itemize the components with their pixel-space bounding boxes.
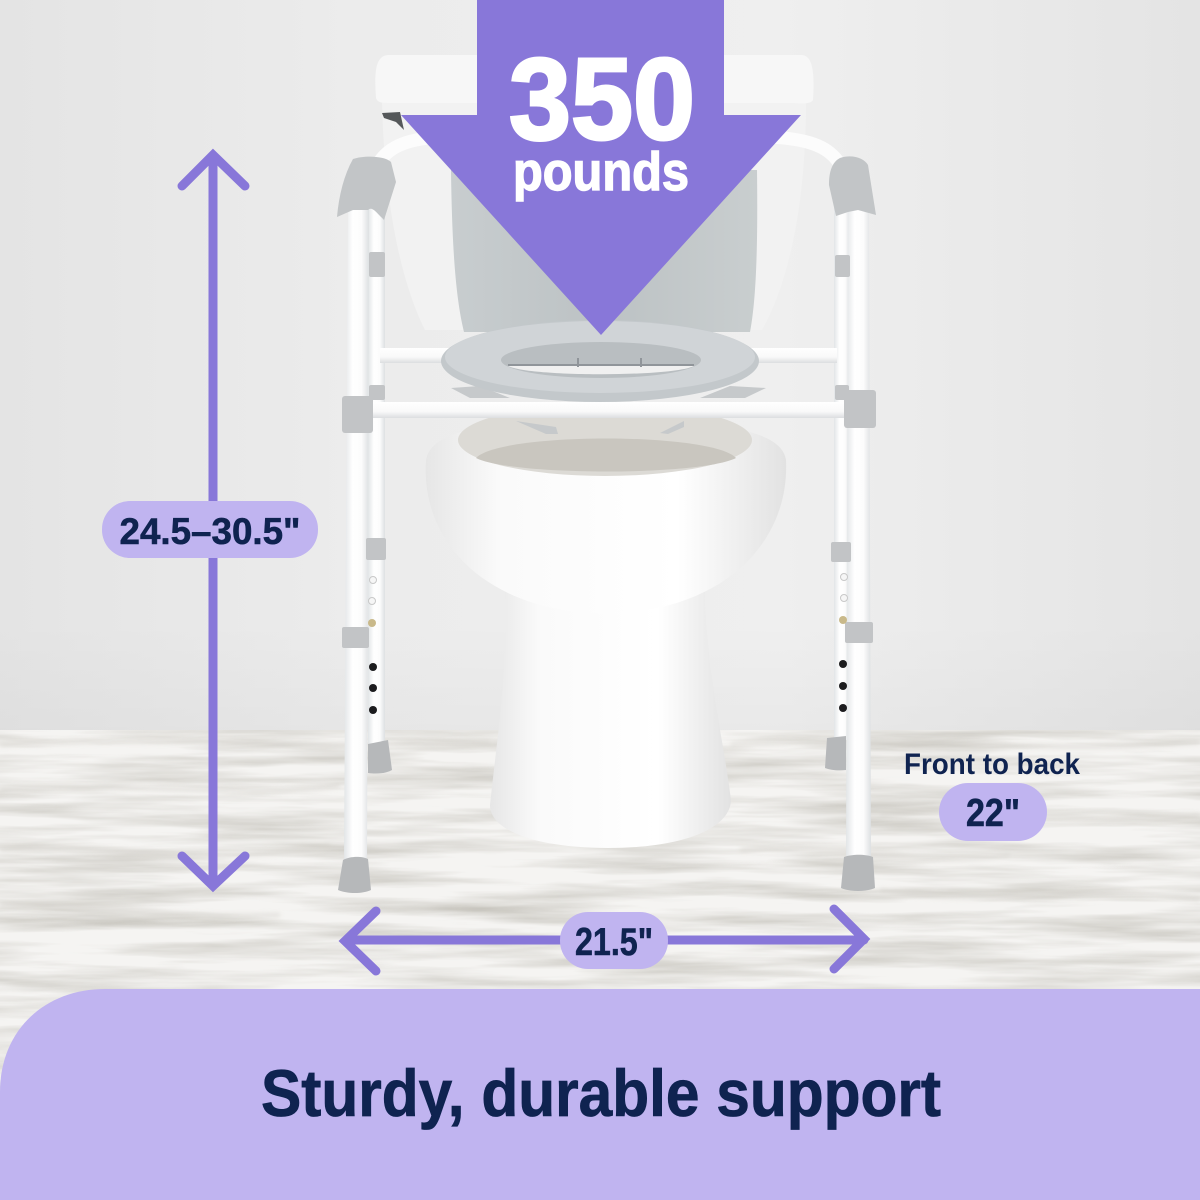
front right leg [846,205,871,860]
front left leg [344,205,369,860]
weight capacity arrow: pounds [513,142,689,202]
leg adjust holes [368,574,848,714]
weight capacity arrow [401,0,801,335]
toilet [375,55,814,848]
marble floor [0,730,1200,1100]
depth label: 22" [966,792,1020,835]
bowl opening [458,404,752,476]
width label: 21.5" [575,921,653,964]
width label [560,912,668,969]
height arrow [102,155,318,886]
bowl [426,420,786,614]
clamps [342,252,876,648]
commode frame [337,137,876,893]
seat brackets [451,386,766,434]
flush lever [382,112,404,130]
height label: 24.5–30.5" [120,511,300,552]
height label [102,501,318,558]
weight capacity arrow: 350 [509,34,695,164]
pedestal [490,590,731,848]
depth label: Front to back [904,748,1080,781]
rear crossbar [380,348,837,363]
back left leg [368,195,385,745]
front crossbar [370,402,846,418]
front right foot [841,855,875,891]
right arm curve [770,137,842,168]
left arm curve [376,137,440,168]
right foam armrest [829,156,876,216]
tank body [382,100,806,330]
front left foot [338,857,371,893]
left foam armrest [337,157,396,220]
back right leg [834,195,850,740]
tank lid [375,55,814,103]
raised lid [451,170,757,332]
back left foot [368,740,392,774]
depth label [904,748,1080,841]
width arrow [345,909,864,971]
back right foot [825,736,846,770]
bottom banner: Sturdy, durable support [261,1056,941,1130]
background wall [0,0,1200,732]
bottom banner [0,989,1200,1200]
commode seat [441,320,759,402]
seat opening [501,342,701,378]
